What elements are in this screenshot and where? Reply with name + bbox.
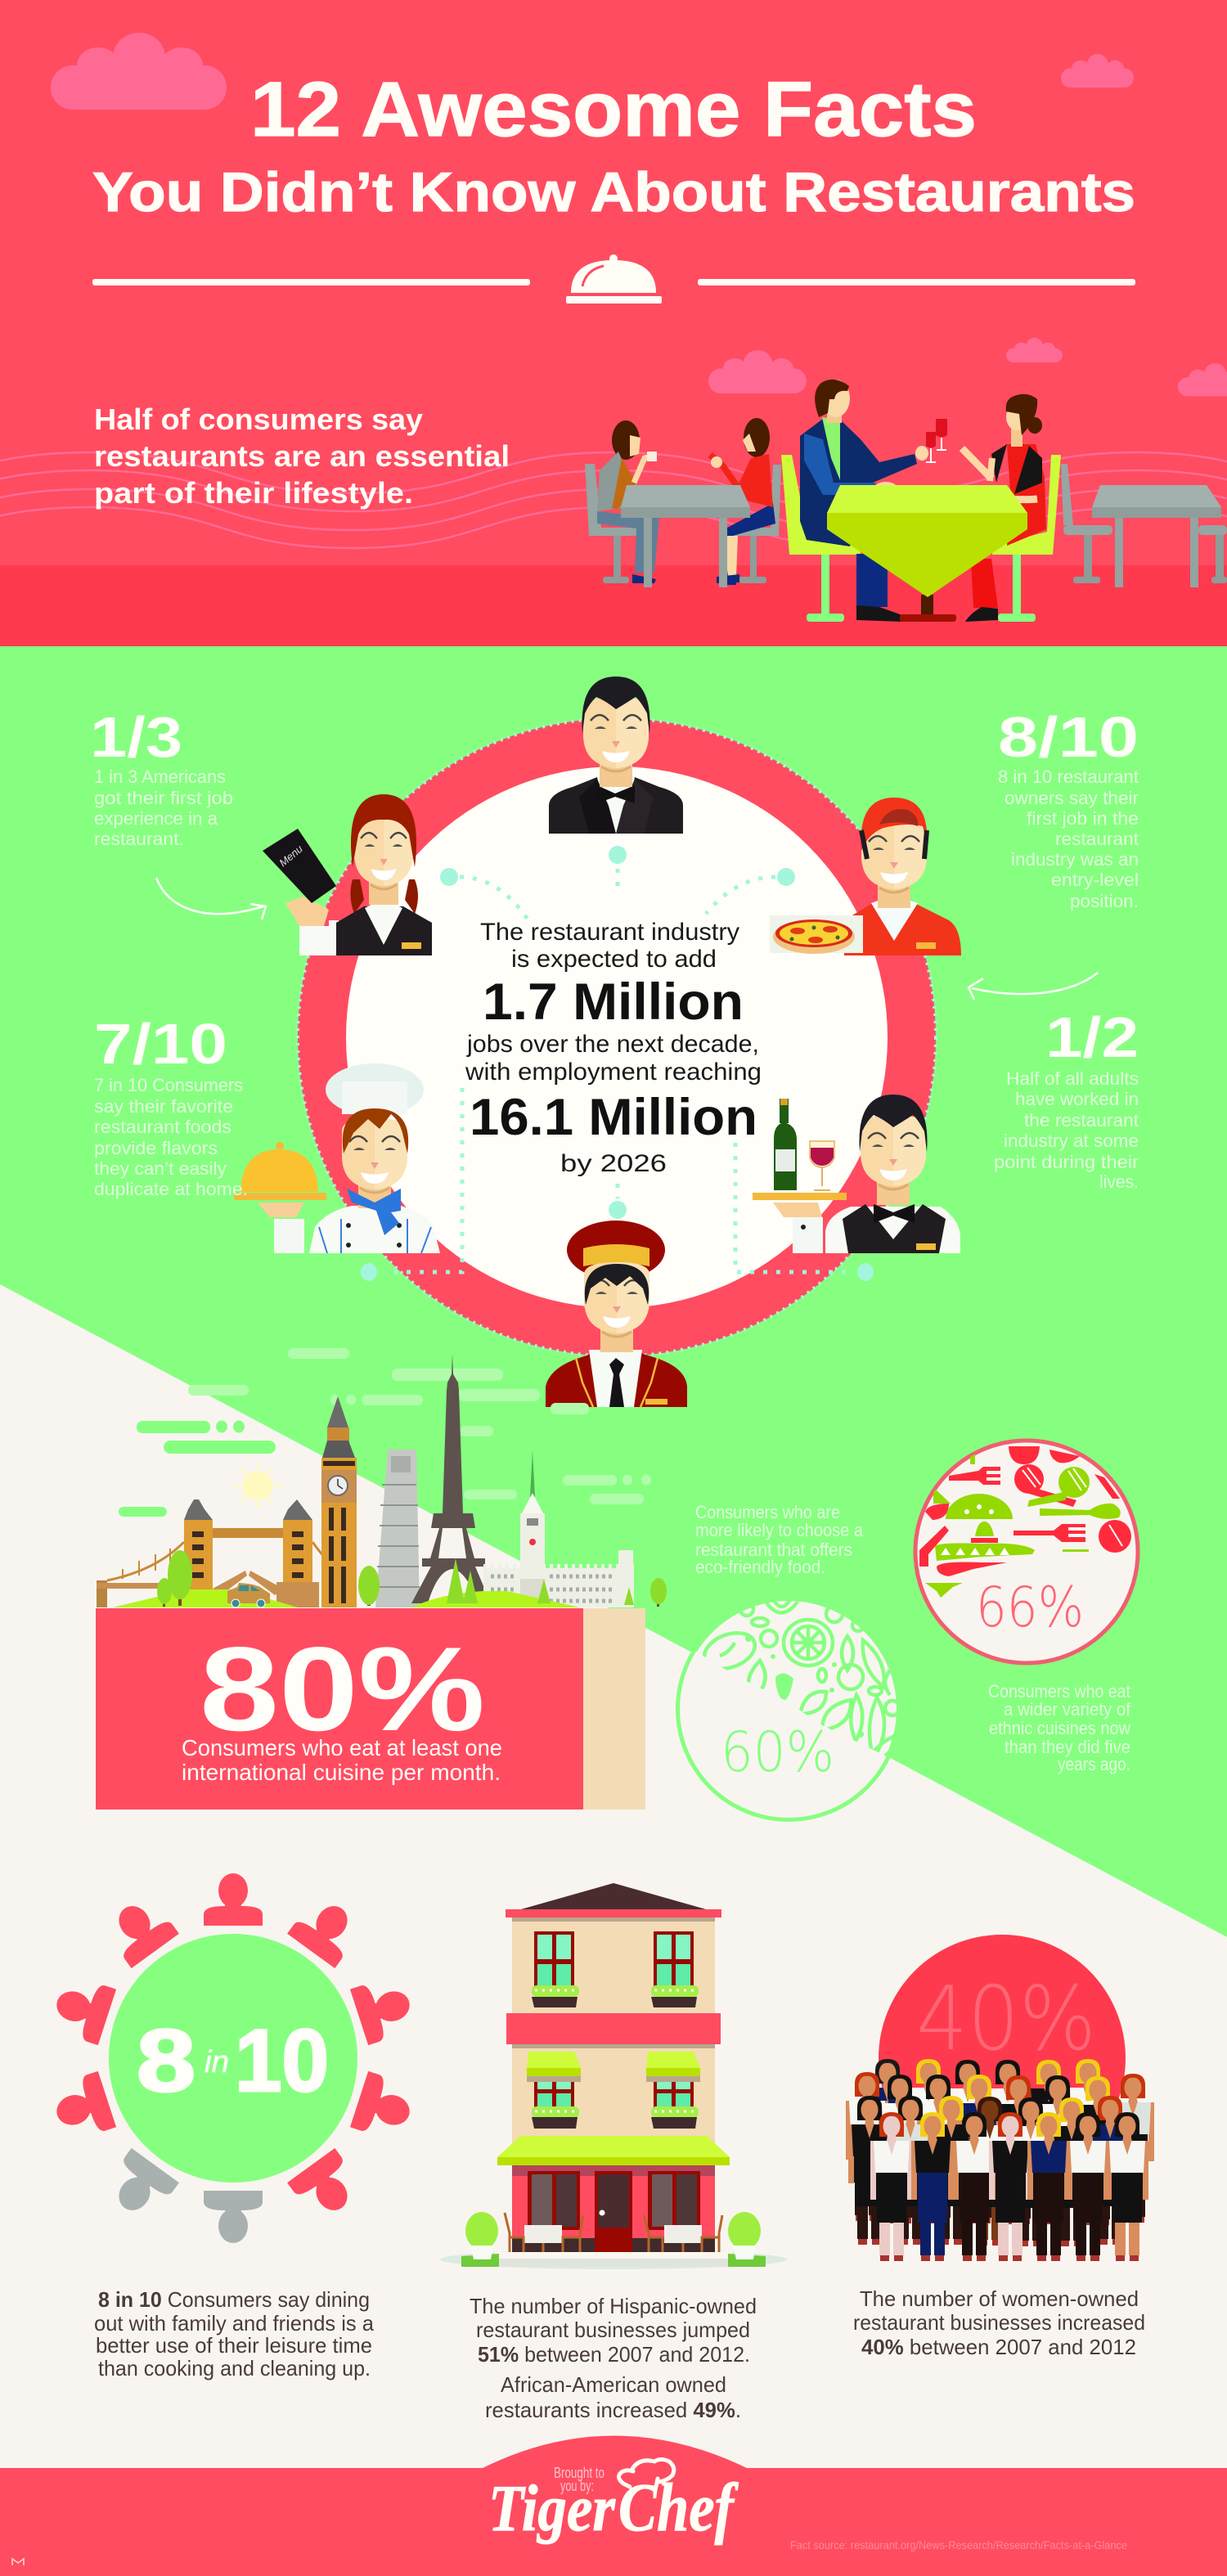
gray table group left <box>585 418 781 587</box>
logo: Tiger Chef: Tiger <box>488 2473 616 2545</box>
text: jobs forecast: 1.7 Million <box>483 973 744 1031</box>
text: women owned <box>853 2286 1145 2359</box>
stat: one of two: industry at some <box>1004 1131 1139 1151</box>
stat: one of two: Half of all adults <box>1006 1068 1139 1089</box>
text: eco-friendly: restaurant that offers <box>695 1540 852 1560</box>
text: jobs forecast: by 2026 <box>560 1150 667 1177</box>
icon: corner mark <box>12 2559 24 2565</box>
stat: one of two: have worked in <box>1015 1089 1139 1109</box>
text: dining out: out with family and friends is a <box>94 2311 375 2335</box>
stat: one in three: got their first job <box>94 788 233 808</box>
stat: seven of ten: duplicate at home. <box>94 1179 248 1199</box>
landmark: pisa tower <box>375 1450 420 1607</box>
stat: seven of ten: say their favorite <box>94 1096 233 1117</box>
character: waitress with menu: Menu <box>276 843 305 869</box>
text: jobs forecast: with employment reaching <box>465 1059 762 1086</box>
text: minority owned: African-American owned <box>501 2372 726 2397</box>
stat: one in three: 1/3 <box>90 705 182 769</box>
text: dining out: better use of their leisure time <box>96 2333 372 2358</box>
stat: eight of ten: first job in the <box>1027 808 1139 829</box>
title: You Didn’t Know About Restaurants <box>92 161 1135 223</box>
stat: one of two <box>994 1005 1139 1192</box>
logo: Tiger Chef: Chef <box>618 2470 739 2546</box>
icon row: ring of people <box>48 1873 418 2243</box>
stat: one in three: experience in a <box>94 808 218 829</box>
lime table and couple <box>781 380 1061 622</box>
arrow: left curved <box>156 878 266 919</box>
man <box>800 419 917 546</box>
chart: 8 in 10 people: in <box>204 2045 229 2079</box>
illustration: diners in restaurant <box>585 380 1227 622</box>
gray table right <box>1061 464 1227 587</box>
text: jobs forecast: 16.1 Million <box>470 1089 757 1146</box>
chart: women owned crowd <box>846 1935 1154 2261</box>
stat: seven of ten: 7 in 10 Consumers <box>94 1075 243 1095</box>
character: head waiter <box>549 677 683 834</box>
character: chef with cloche <box>234 1063 440 1253</box>
panel: footer <box>0 2436 1227 2576</box>
stat: eight of ten: entry-level <box>1051 870 1139 890</box>
stat: eight of ten: 8/10 <box>998 705 1139 769</box>
title <box>92 66 1135 223</box>
text: ethnic cuisines: ethnic cuisines now <box>989 1718 1130 1738</box>
text: half of consumers: restaurants are an essential <box>94 439 510 473</box>
stat: seven of ten: provide flavors <box>94 1138 218 1158</box>
hills, trees and car <box>113 1550 667 1607</box>
icon: cloche divider <box>92 254 1135 303</box>
text: half of consumers: part of their lifestyle. <box>94 476 413 510</box>
icon: forks and maracas pattern <box>919 1446 1131 1576</box>
text: fact source: Fact source: restaurant.org/News-Research/Research/Facts-at-a-Glance <box>790 2538 1127 2551</box>
icon: pizza <box>773 919 855 954</box>
text: jobs forecast: The restaurant industry <box>480 919 739 946</box>
chart: 66 percent circle <box>915 1441 1138 1663</box>
landmark: eiffel tower <box>411 1354 491 1603</box>
chart: 8 in 10 people: 10 <box>235 2011 329 2110</box>
decorative waves <box>0 452 1227 548</box>
sky clouds <box>188 1348 651 1504</box>
stat: eight of ten: industry was an <box>1011 849 1139 870</box>
title: 12 Awesome Facts <box>250 66 977 153</box>
text: eco-friendly: eco-friendly food. <box>695 1557 825 1577</box>
stat: one in three: 1 in 3 Americans <box>94 767 226 787</box>
stat: one in three <box>90 705 233 849</box>
text: brought to you by <box>554 2465 605 2494</box>
illustration: restaurant building <box>440 1883 787 2269</box>
stat: seven of ten: they can’t easily <box>94 1158 227 1179</box>
landmark: tower bridge <box>97 1499 342 1607</box>
text: ethnic cuisines <box>988 1681 1131 1774</box>
icon: wine bottle and glass <box>774 1099 834 1190</box>
stat: seven of ten <box>94 1012 248 1199</box>
text: ethnic cuisines: than they did five <box>1005 1737 1130 1757</box>
text: minority owned <box>470 2294 757 2422</box>
stat: seven of ten: 7/10 <box>94 1012 227 1076</box>
character: waiter with wine <box>753 1095 960 1253</box>
stat: eight of ten: owners say their <box>1005 788 1139 808</box>
icon: car <box>227 1583 270 1603</box>
text: brought to you by: you by: <box>560 2478 594 2494</box>
chart: 8 in 10 people: 8 <box>137 2011 196 2110</box>
woman <box>1007 444 1046 546</box>
text: women owned: 40% between 2007 and 2012 <box>861 2335 1136 2359</box>
panel: 80 percent <box>96 1608 645 1809</box>
chart: 60 percent circle: 60% <box>721 1720 834 1785</box>
stat: eight of ten: position. <box>1070 891 1139 911</box>
planters <box>461 2212 766 2267</box>
character: pizza cook <box>770 798 961 955</box>
text: dining out: than cooking and cleaning up. <box>98 2356 371 2380</box>
text: jobs forecast <box>465 919 762 1177</box>
illustration: world landmarks <box>97 1348 667 1607</box>
chart: 66 percent circle: 66% <box>976 1576 1084 1640</box>
character: waitress with menu <box>263 794 432 955</box>
text: women owned: The number of women-owned <box>860 2286 1139 2311</box>
panel: header <box>0 0 1227 646</box>
text: jobs forecast: is expected to add <box>511 946 717 973</box>
icon: gold cloche <box>234 1142 326 1217</box>
chart: 60 percent circle <box>671 1598 900 1832</box>
decorative clouds <box>51 33 1227 396</box>
storefront <box>495 2136 732 2267</box>
icon: sun <box>234 1464 281 1507</box>
text: women owned: restaurant businesses increased <box>853 2310 1145 2335</box>
text: eco-friendly: more likely to choose a <box>695 1520 864 1540</box>
arrow: right curved <box>969 973 1098 1000</box>
text: half of consumers: Half of consumers say <box>94 402 423 436</box>
chart: central restaurant jobs ring <box>234 677 961 1407</box>
text: ethnic cuisines: Consumers who eat <box>988 1681 1130 1702</box>
chart: 8 in 10 people <box>48 1873 418 2243</box>
text: ethnic cuisines: a wider variety of <box>1004 1699 1131 1720</box>
text: dining out: 8 in 10 Consumers say dining <box>98 2287 370 2312</box>
text: half of consumers <box>94 402 510 510</box>
logo: Tiger Chef <box>488 2470 739 2546</box>
landmark: palace and spire <box>483 1450 634 1607</box>
crowd of women <box>846 2059 1154 2261</box>
stat: one of two: the restaurant <box>1024 1110 1139 1131</box>
landmark: big ben <box>321 1396 357 1607</box>
stat: eight of ten <box>998 705 1139 911</box>
upper windows <box>532 1931 699 2007</box>
panel: 80 percent: 80% <box>200 1622 485 1756</box>
stat: seven of ten: restaurant foods <box>94 1117 231 1137</box>
lower windows <box>527 2052 700 2129</box>
wine glasses <box>926 432 936 448</box>
panel: 80 percent: international cuisine per month. <box>182 1760 501 1785</box>
text: brought to you by: Brought to <box>554 2465 605 2481</box>
stat: one in three: restaurant. <box>94 829 184 849</box>
text: minority owned: The number of Hispanic-owned <box>470 2294 757 2318</box>
icon: fruit pattern <box>699 1600 900 1767</box>
text: eco-friendly: Consumers who are <box>695 1502 840 1522</box>
text: minority owned: restaurant businesses jumped <box>476 2318 750 2342</box>
woman gray <box>597 511 659 573</box>
stat: eight of ten: restaurant <box>1055 829 1139 849</box>
text: jobs forecast: jobs over the next decade, <box>466 1031 759 1058</box>
icon: chef hat <box>618 2459 674 2487</box>
stat: one of two: lives. <box>1099 1171 1139 1192</box>
text: ethnic cuisines: years ago. <box>1058 1754 1130 1774</box>
text: eco-friendly <box>695 1502 864 1577</box>
text: dining out <box>94 2287 375 2380</box>
text: minority owned: 51% between 2007 and 2012. <box>478 2342 750 2367</box>
stat: one of two: point during their <box>994 1152 1139 1172</box>
stat: eight of ten: 8 in 10 restaurant <box>998 767 1139 787</box>
chart: women owned crowd: 40% <box>916 1968 1096 2070</box>
stat: one of two: 1/2 <box>1045 1005 1139 1069</box>
woman red <box>720 503 775 585</box>
panel: 80 percent: Consumers who eat at least one <box>182 1735 502 1760</box>
text: minority owned: restaurants increased 49%. <box>485 2398 741 2422</box>
dotted connectors <box>384 869 851 1272</box>
character: bellhop <box>546 1221 687 1407</box>
